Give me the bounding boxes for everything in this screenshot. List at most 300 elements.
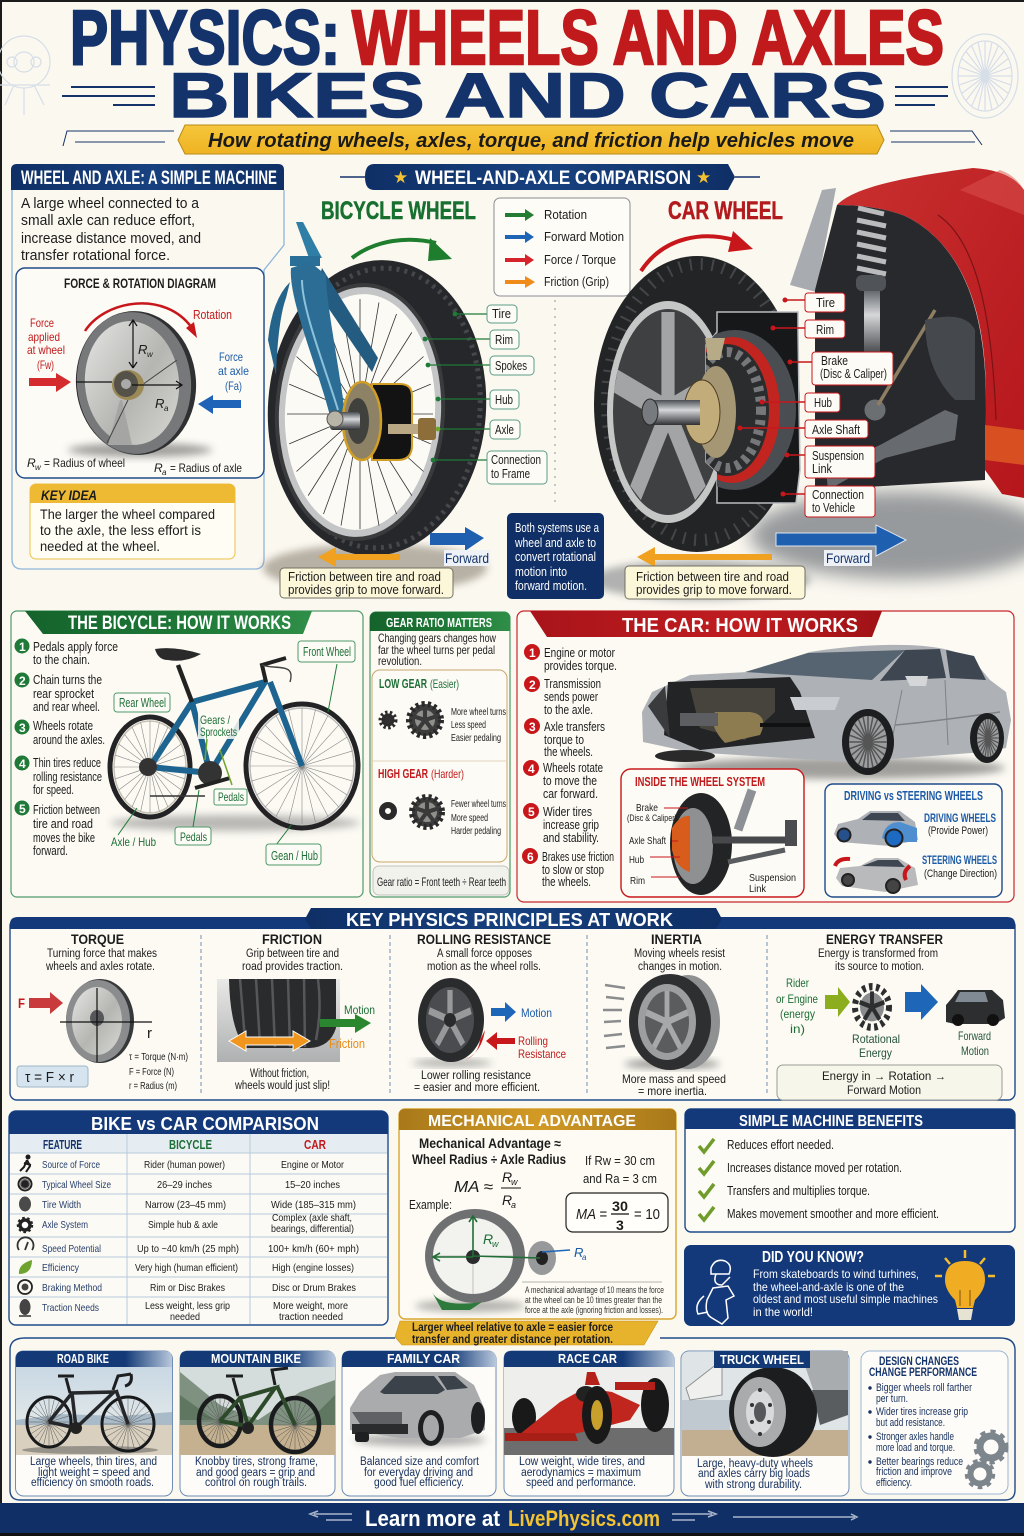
table rows: bearings, differential): [271, 1223, 354, 1235]
formula: Mechanical Advantage ≈: [419, 1136, 562, 1151]
caption: road bike: efficiency on smooth roads.: [31, 1477, 154, 1489]
legend: Force / Torque: [544, 253, 616, 267]
heading: bicycle: THE BICYCLE: HOW IT WORKS: [68, 613, 291, 634]
table rows: needed: [170, 1311, 200, 1323]
caption: road bike: [30, 1456, 157, 1489]
gear ratio formula: [373, 866, 509, 895]
principle: energy transfer: in): [790, 1022, 805, 1036]
car steps list: and stability.: [543, 830, 599, 845]
label: connection to frame: Connection: [491, 453, 541, 467]
intro text: [21, 196, 201, 264]
card: design changes: Bigger wheels roll farther: [876, 1382, 972, 1394]
heading: mechanical advantage: [399, 1109, 676, 1130]
label: connection to frame: [431, 451, 547, 484]
table column headers: CAR: [304, 1138, 326, 1152]
high gear: [378, 766, 506, 837]
low and high gear box: [372, 670, 507, 862]
label: suspension link: Suspension: [812, 449, 864, 463]
car steps list: torque to: [544, 732, 584, 747]
callout: car friction: Friction between tire and road: [636, 570, 789, 584]
inset: inside the wheel system: Brake: [636, 802, 658, 814]
benefits list: Makes movement smoother and more efficient.: [727, 1207, 939, 1221]
illustration: bicycle: [110, 641, 360, 865]
force and rotation diagram: [16, 268, 264, 478]
label: rim: Rim: [495, 333, 513, 347]
formula: Wheel Radius ÷ Axle Radius: [412, 1152, 566, 1167]
heading: simple machine benefits: SIMPLE MACHINE BENEFITS: [739, 1113, 923, 1130]
callout: both systems: [507, 513, 604, 599]
worked example values: If Rw = 30 cm: [585, 1154, 655, 1168]
table column headers: [10, 1134, 387, 1153]
table rows: Complex (axle shaft,: [272, 1212, 352, 1224]
principle: torque: wheels and axles rotate.: [45, 961, 155, 973]
label: suspension link: [784, 446, 875, 478]
steps list: Chain turns the: [33, 672, 102, 687]
intro text: transfer rotational force.: [21, 248, 170, 264]
hub assembly: [327, 382, 436, 460]
principle: friction: Grip between tire and: [246, 948, 339, 960]
principle: energy transfer: (energy: [780, 1007, 815, 1021]
steps list: Wheels rotate: [33, 718, 93, 733]
label: car tire: [782, 293, 845, 312]
footer: Learn more at: [365, 1506, 501, 1531]
illustration: road bike: [22, 1374, 158, 1454]
illustration: car wheel: [590, 168, 1024, 600]
card: road bike: [16, 1351, 172, 1496]
high gear: Fewer wheel turns: [451, 798, 506, 810]
principle: friction: [217, 932, 375, 1092]
formula: R: [502, 1192, 512, 1208]
diagram key: R: [27, 456, 36, 470]
callout: key idea: needed at the wheel.: [40, 538, 160, 554]
car steps list: to move the: [543, 773, 597, 788]
panel: did you know: oldest and most useful simple machines: [753, 1292, 938, 1306]
label: suspension link: Link: [812, 462, 833, 476]
label: spokes: [426, 356, 534, 375]
principle: rolling resistance: ROLLING RESISTANCE: [417, 932, 551, 947]
principle: friction: wheels would just slip!: [234, 1080, 330, 1092]
car steps list: the wheels.: [542, 874, 591, 889]
fork: [268, 222, 378, 424]
table rows: [42, 1159, 359, 1323]
heading: wheel and axle comparison: [340, 164, 760, 190]
arrow: friction: [318, 547, 400, 567]
steps list: 5: [19, 802, 26, 816]
principle: torque: TORQUE: [71, 932, 124, 947]
title: [62, 0, 948, 131]
illustration: wheel and axle: [415, 1209, 587, 1312]
label: car hub: Hub: [814, 396, 832, 410]
card: design changes: DESIGN CHANGES: [879, 1356, 959, 1368]
table rows: Narrow (23–45 mm): [145, 1199, 226, 1211]
diagram key: = Radius of axle: [170, 461, 242, 475]
car steps list: 3: [529, 720, 536, 734]
car steps list: the wheels.: [544, 744, 593, 759]
footer: [0, 1503, 1024, 1536]
inset: inside the wheel system: [621, 769, 804, 897]
table rows: High (engine losses): [272, 1262, 354, 1274]
arrow: car friction: [637, 547, 772, 567]
principle: energy transfer: Forward Motion: [847, 1085, 921, 1097]
illustration: sedan with engine cutaway: [642, 645, 1011, 779]
callout: car friction: provides grip to move forward.: [636, 583, 792, 597]
high gear: HIGH GEAR: [378, 766, 428, 781]
label: car tire: Tire: [816, 296, 835, 310]
principle: inertia: changes in motion.: [638, 961, 722, 973]
callout: both systems: convert rotational: [515, 550, 596, 564]
steps list: 2: [19, 674, 26, 688]
arrow: force at axle: at axle: [218, 364, 249, 378]
steps list: 1: [19, 640, 26, 654]
icon: diagram wheel: R: [155, 396, 164, 411]
heading: wheel and axle comparison: WHEEL-AND-AXLE COMPARISON: [415, 168, 691, 189]
heading: key physics principles: KEY PHYSICS PRINCIPLES AT WORK: [346, 910, 673, 930]
label: axle and hub: Axle / Hub: [111, 835, 156, 849]
table icons: [18, 1154, 34, 1316]
callout: larger wheel ribbon: [395, 1321, 658, 1346]
label: gears and sprockets: Sprockets: [200, 725, 237, 739]
inset: inside the wheel system: INSIDE THE WHEEL SYSTEM: [635, 774, 765, 789]
panel: gear ratio matters: [370, 612, 510, 897]
formula: w: [511, 1177, 518, 1187]
card: design changes: efficiency.: [876, 1477, 912, 1489]
principle: rolling resistance: = easier and more efficient.: [414, 1082, 540, 1094]
icon: diagram wheel: R: [138, 342, 147, 357]
panel: mechanical advantage: [395, 1109, 676, 1346]
high gear: Harder pedaling: [451, 825, 501, 837]
car steps list: [522, 644, 617, 889]
car body: [815, 168, 1024, 498]
car steps list: provides torque.: [544, 658, 617, 673]
note: ma explanation: force at the axle (ignoring friction and losses).: [525, 1305, 663, 1315]
principle: torque: Turning force that makes: [47, 948, 157, 960]
worked example values: and Ra = 3 cm: [583, 1172, 657, 1186]
illustration: race car: [505, 1372, 669, 1444]
cutaway brake: [642, 312, 800, 503]
gear intro text: [378, 631, 496, 668]
card: family car: [342, 1351, 496, 1496]
heading: wheel and axle comparison: ★: [393, 168, 408, 187]
footer: LivePhysics.com: [508, 1506, 660, 1531]
formula: [412, 1136, 566, 1210]
principle: energy transfer: Rotational: [852, 1032, 900, 1046]
principle: energy transfer: Rider: [786, 976, 809, 990]
panel: did you know: From skateboards to wind turhines,: [753, 1267, 919, 1281]
label: connection to vehicle: to Vehicle: [812, 501, 855, 515]
card: truck wheel: [681, 1351, 849, 1496]
card: design changes: CHANGE PERFORMANCE: [869, 1367, 977, 1379]
high gear: More speed: [451, 812, 488, 824]
callout: both systems: forward motion.: [515, 579, 587, 593]
intro text: increase distance moved, and: [21, 231, 201, 247]
caption: mountain bike: and good gears = grip and: [196, 1467, 315, 1479]
caption: mountain bike: [195, 1456, 318, 1489]
label: gear and hub: [266, 824, 321, 865]
label: car rim: [770, 320, 845, 338]
table rows: Less weight, less grip: [145, 1300, 230, 1312]
principle: friction: Friction: [329, 1037, 365, 1051]
card: design changes: Stronger axles handle: [876, 1431, 954, 1443]
worked example values: 3: [616, 1217, 624, 1233]
caption: race car: aerodynamics = maximum: [521, 1467, 641, 1479]
inset: driving vs steering wheels: (Change Direction): [924, 868, 997, 880]
illustration: truck wheel: [686, 1351, 848, 1457]
callout: key idea: to the axle, the less effort is: [40, 522, 201, 538]
principle: rolling resistance: Resistance: [518, 1047, 566, 1061]
car steps list: to slow or stop: [542, 862, 604, 877]
heading: gear ratio: [370, 612, 510, 631]
table rows: Engine or Motor: [281, 1159, 344, 1171]
caption: family car: good fuel efficiency.: [374, 1477, 464, 1489]
principle: energy transfer: Energy in → Rotation →: [822, 1071, 946, 1083]
arrow: forward: Forward: [445, 550, 489, 566]
callout: both systems: wheel and axle to: [514, 536, 596, 550]
inset: driving vs steering wheels: [825, 784, 1002, 897]
principle: rolling resistance: [412, 932, 566, 1094]
principle: torque: r = Radius (m): [129, 1081, 177, 1092]
principle: inertia: [603, 932, 726, 1098]
caption: family car: for everyday driving and: [364, 1467, 473, 1479]
steps list: Pedals apply force: [33, 639, 118, 654]
callout: key idea: [30, 484, 235, 559]
legend: Rotation: [544, 208, 587, 222]
subtitle ribbon: [63, 125, 982, 154]
label: gears and sprockets: Gears /: [200, 713, 230, 727]
low gear: (Easier): [430, 677, 459, 691]
table rows: Rider (human power): [144, 1159, 225, 1171]
card: design changes: more load and torque.: [876, 1442, 955, 1454]
car steps list: 2: [529, 678, 536, 692]
car steps list: 4: [528, 762, 535, 776]
table rows: Simple hub & axle: [148, 1219, 218, 1231]
benefits list: Transfers and multiplies torque.: [727, 1184, 870, 1198]
principle: torque: τ = Torque (N·m): [129, 1052, 188, 1063]
principle: inertia: = more inertia.: [638, 1084, 707, 1098]
principle: energy transfer: its source to motion.: [835, 961, 924, 973]
arrow: force at wheel: [27, 316, 71, 392]
caption: race car: speed and performance.: [526, 1477, 636, 1489]
diagram key: [27, 456, 242, 477]
label: front wheel: Front Wheel: [303, 645, 351, 659]
icon: light bulb: [935, 1250, 995, 1320]
table rows: 26–29 inches: [157, 1179, 212, 1191]
card: design changes: Wider tires increase grip: [876, 1406, 968, 1418]
low gear: [379, 676, 506, 744]
card: truck wheel: TRUCK WHEEL: [720, 1353, 804, 1367]
label: car brake: [788, 352, 893, 385]
panel: key physics principles: [10, 908, 1015, 1100]
caption: race car: Low weight, wide tires, and: [519, 1456, 645, 1468]
callout: key idea: The larger the wheel compared: [40, 506, 215, 522]
principle: torque: r: [147, 1025, 152, 1042]
principle: rolling resistance: A small force opposes: [437, 948, 532, 960]
steps list: Friction between: [33, 802, 100, 817]
principle: rolling resistance: Lower rolling resistance: [421, 1070, 531, 1082]
inset: inside the wheel system: Axle Shaft: [629, 835, 666, 847]
icon: diagram wheel: a: [164, 404, 169, 413]
caption: truck wheel: Large, heavy-duty wheels: [697, 1458, 813, 1470]
caption: family car: Balanced size and comfort: [360, 1456, 480, 1468]
label: hub: [436, 390, 519, 409]
principle: energy transfer: Energy is transformed from: [818, 948, 938, 960]
legend: Friction (Grip): [544, 275, 609, 289]
arrow: car forward: Forward: [826, 550, 870, 566]
intro text: small axle can reduce effort,: [21, 213, 195, 229]
car steps list: 5: [528, 805, 535, 819]
card: race car: [504, 1351, 674, 1496]
panel: wheel and axle simple machine: [11, 164, 284, 569]
arrow: force at wheel: (Fw): [37, 358, 54, 372]
force and rotation diagram: FORCE & ROTATION DIAGRAM: [64, 276, 216, 291]
table rows: 15–20 inches: [285, 1179, 340, 1191]
panel: the bicycle how it works: [11, 611, 363, 897]
table: bike vs car comparison: [9, 1111, 388, 1325]
car steps list: Wider tires: [543, 804, 592, 819]
low gear: LOW GEAR: [379, 676, 427, 691]
diagram key: a: [162, 468, 167, 477]
label: axle: Axle: [495, 423, 514, 437]
label: tire: Tire: [492, 307, 511, 321]
low gear: Less speed: [451, 719, 486, 731]
heading: wheel and axle: [11, 164, 284, 190]
arrow: wheel rotation: [352, 238, 452, 261]
callout: bicycle friction: provides grip to move forward.: [288, 583, 444, 597]
panel: simple machine benefits: [685, 1109, 1015, 1232]
illustration: wheel and axle: w: [492, 1239, 499, 1249]
steps list: 3: [19, 721, 26, 735]
gear intro text: revolution.: [378, 654, 422, 668]
callout: key idea: KEY IDEA: [41, 487, 97, 503]
callout: bicycle friction: Friction between tire and road: [288, 570, 441, 584]
label: pedals lower: Pedals: [180, 830, 207, 844]
label: pedals upper: [214, 789, 247, 805]
principle: torque: τ = F × r: [25, 1070, 74, 1086]
inset: inside the wheel system: (Disc & Caliper): [627, 813, 677, 824]
principle: inertia: More mass and speed: [622, 1072, 726, 1086]
panel: did you know: the wheel-and-axle is one of the: [753, 1280, 904, 1294]
panel: did you know: in the world!: [753, 1305, 813, 1319]
car steps list: 1: [529, 646, 536, 660]
arrow: rotation: Rotation: [193, 308, 232, 322]
card: design changes: but add resistance.: [876, 1417, 945, 1429]
label: axle shaft: Axle Shaft: [812, 423, 860, 437]
car steps list: Brakes use friction: [542, 849, 614, 864]
worked example values: MA =: [576, 1206, 607, 1223]
card: design changes: [861, 1351, 1008, 1494]
label: pedals lower: [175, 790, 211, 845]
steps list: Thin tires reduce: [33, 755, 101, 770]
card: mountain bike: [180, 1351, 335, 1496]
panel: the car how it works: [517, 611, 1014, 902]
card: road bike: ROAD BIKE: [57, 1352, 109, 1366]
car steps list: sends power: [544, 689, 598, 704]
arrow: force at axle: Force: [219, 350, 243, 364]
principle: energy transfer: [776, 932, 1005, 1100]
principle: torque: F: [18, 995, 25, 1011]
arrow: force at wheel: Force: [30, 316, 54, 330]
gear intro text: far the wheel turns per pedal: [378, 643, 495, 657]
steps list: around the axles.: [33, 732, 105, 747]
note: ma explanation: at the wheel can be 10 times greater than the: [525, 1295, 662, 1305]
table rows: Efficiency: [42, 1262, 80, 1274]
suspension: [826, 208, 975, 490]
principle: energy transfer: or Engine: [776, 992, 818, 1006]
illustration: mountain bike: [199, 1368, 319, 1452]
icon: child with backpack: [697, 1260, 734, 1324]
label: pedals upper: Pedals: [218, 790, 244, 804]
table column headers: FEATURE: [43, 1138, 82, 1152]
inset: inside the wheel system: Suspension: [749, 872, 796, 884]
illustration: car wheel: CAR WHEEL: [668, 197, 783, 225]
label: gear and hub: Gean / Hub: [271, 849, 318, 863]
car steps list: Transmission: [544, 676, 601, 691]
gear intro text: Changing gears changes how: [378, 631, 496, 645]
label: rear wheel: Rear Wheel: [119, 696, 166, 710]
title: BIKES AND CARS: [169, 61, 886, 131]
arrow: forward: [430, 527, 490, 566]
table rows: Very high (human efficient): [135, 1262, 238, 1274]
gear ratio formula: Gear ratio = Front teeth ÷ Rear teeth: [377, 875, 506, 889]
callout: larger wheel ribbon: transfer and greater distance per rotation.: [412, 1334, 613, 1346]
principle: energy transfer: Forward: [958, 1029, 991, 1043]
caption: road bike: Large wheels, thin tires, and: [30, 1456, 157, 1468]
card: race car: RACE CAR: [558, 1352, 617, 1366]
principle: energy transfer: Motion: [961, 1044, 989, 1058]
label: car brake: Brake: [821, 354, 848, 368]
card: mountain bike: MOUNTAIN BIKE: [211, 1352, 301, 1366]
label: connection to vehicle: Connection: [812, 488, 864, 502]
car steps list: Axle transfers: [544, 719, 605, 734]
heading: bike vs car: BIKE vs CAR COMPARISON: [91, 1114, 319, 1134]
principle: energy transfer: Energy: [859, 1046, 892, 1060]
worked example values: Example:: [409, 1198, 452, 1212]
caption: truck wheel: with strong durability.: [704, 1479, 802, 1491]
car steps list: increase grip: [543, 817, 599, 832]
low gear: Easier pedaling: [451, 732, 501, 744]
worked example values: [409, 1154, 668, 1233]
label: tire: [453, 305, 517, 323]
heading: simple machine benefits: [685, 1109, 1015, 1130]
icon: checkmarks: [699, 1139, 714, 1220]
table rows: Speed Potential: [42, 1243, 101, 1255]
formula: a: [511, 1200, 516, 1210]
steps list: forward.: [33, 843, 68, 858]
illustration: bicycle wheel: [258, 197, 547, 598]
legend: Forward Motion: [544, 230, 624, 244]
inset: driving vs steering wheels: (Provide Power): [928, 825, 988, 837]
callout: larger wheel ribbon: Larger wheel relative to axle = easier force: [412, 1322, 613, 1334]
principle: torque: F = Force (N): [129, 1067, 174, 1078]
label: axle and hub: [111, 808, 156, 849]
steps list: moves the bike: [33, 830, 95, 845]
caption: race car: [519, 1456, 645, 1489]
card: family car: FAMILY CAR: [387, 1352, 460, 1366]
illustration: wheel and axle: R: [483, 1231, 493, 1247]
illustration: family suv: [350, 1372, 486, 1446]
steps list: [14, 638, 118, 858]
diagram key: R: [154, 461, 163, 475]
formula: R: [502, 1169, 512, 1185]
table rows: Wide (185–315 mm): [271, 1199, 356, 1211]
table rows: Disc or Drum Brakes: [272, 1282, 356, 1294]
table rows: Traction Needs: [42, 1302, 99, 1314]
diagram key: w: [35, 463, 42, 472]
card: design changes: friction and improve: [876, 1466, 952, 1478]
worked example values: 30: [612, 1198, 628, 1214]
low gear: More wheel turns: [451, 706, 506, 718]
heading: wheel and axle comparison: ★: [696, 168, 711, 187]
heading: bicycle: [25, 611, 312, 634]
